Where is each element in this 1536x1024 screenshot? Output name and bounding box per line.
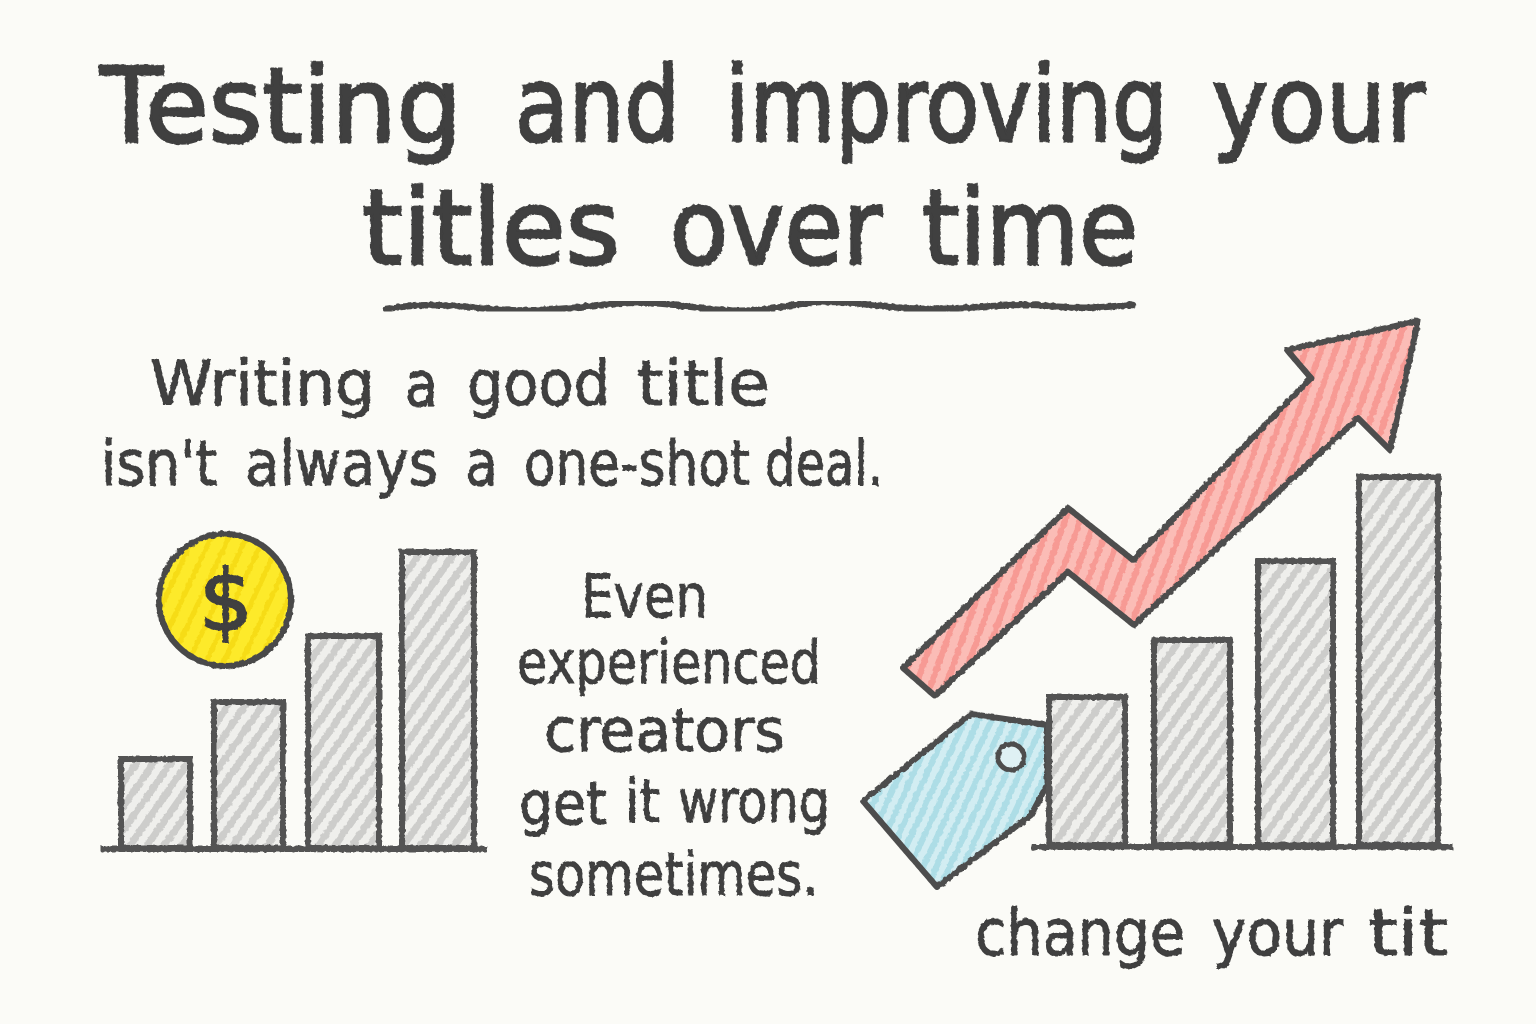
title: over [670, 167, 882, 289]
title [99, 44, 1425, 289]
title: improving [725, 44, 1168, 166]
title: your [1212, 44, 1425, 166]
title: titles [362, 167, 620, 289]
bottom caption [975, 897, 1448, 971]
intro text: title [637, 347, 770, 420]
icon: blue price tag [863, 714, 1047, 887]
middle text: it [625, 767, 660, 837]
title underline [386, 302, 1133, 311]
middle text: get [519, 769, 607, 839]
intro text: always [245, 427, 438, 500]
intro text: good [467, 347, 610, 420]
left bar chart [101, 552, 487, 849]
middle text: creators [544, 696, 785, 766]
intro text: a [405, 348, 438, 421]
icon: dollar coin [159, 534, 291, 666]
title: Testing [99, 45, 462, 167]
icon: dollar coin: $ [199, 552, 253, 650]
intro text: isn't [101, 427, 217, 500]
intro text [101, 347, 883, 500]
bottom caption: your [1212, 897, 1344, 971]
middle text [517, 562, 830, 910]
title: time [922, 167, 1138, 289]
middle text: experienced [517, 628, 821, 698]
intro text: a [465, 427, 498, 500]
right bar chart [1031, 477, 1453, 847]
middle text: Even [581, 562, 708, 632]
bottom caption: tit [1368, 897, 1448, 971]
bottom caption: change [975, 897, 1185, 971]
arrow: rising red trend [903, 321, 1418, 696]
middle text: sometimes. [529, 840, 818, 910]
middle text: wrong [678, 767, 830, 837]
title: and [515, 44, 680, 166]
intro text: Writing [150, 347, 375, 420]
intro text: deal. [765, 427, 883, 500]
intro text: one-shot [524, 427, 750, 500]
